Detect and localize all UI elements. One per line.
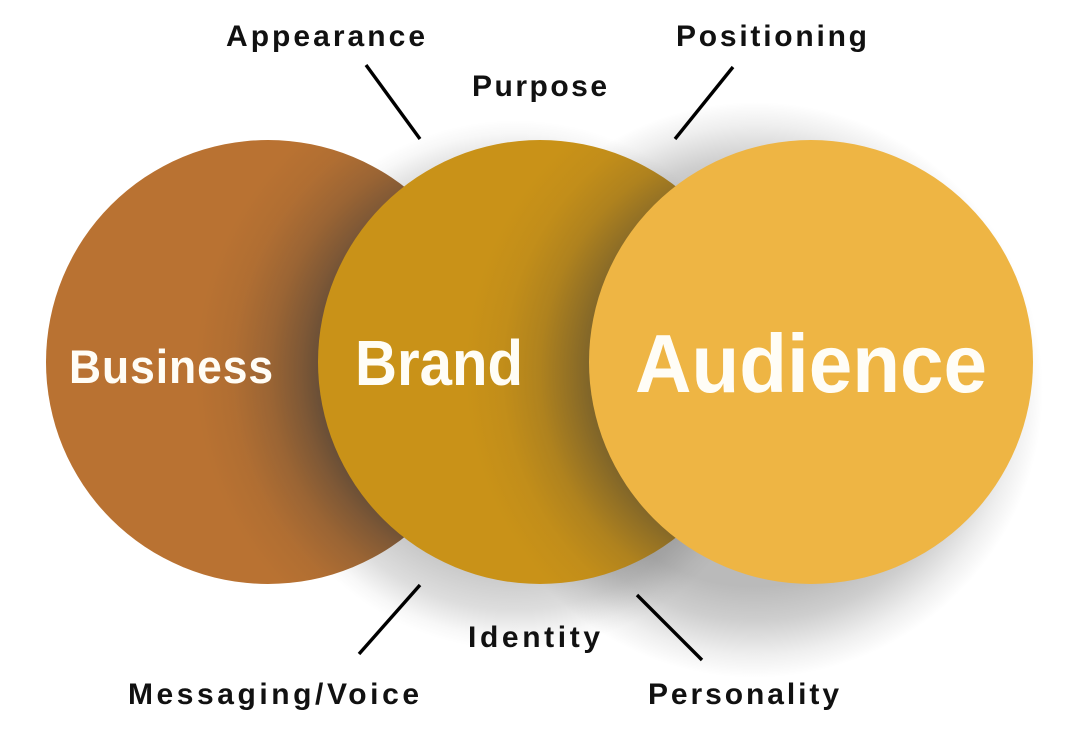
label: Personality: Personality (648, 678, 839, 711)
connector: Positioning (675, 67, 733, 139)
circle: Brand (318, 140, 676, 584)
connector: Personality (637, 595, 702, 660)
label: Messaging/Voice: Messaging/Voice (128, 678, 419, 711)
drop shadow behind circles (250, 102, 1043, 678)
circle: Audience (589, 140, 1033, 584)
connector: Appearance (366, 65, 420, 139)
connector: Messaging/Voice (359, 585, 420, 654)
label: Appearance: Appearance (226, 20, 425, 53)
label: Brand: Brand (355, 327, 523, 399)
label: Audience: Audience (635, 317, 987, 410)
label: Business: Business (69, 340, 274, 393)
label: Positioning: Positioning (676, 20, 867, 53)
label: Purpose: Purpose (472, 70, 607, 103)
label: Identity: Identity (468, 621, 600, 654)
circle: Business (46, 140, 404, 584)
